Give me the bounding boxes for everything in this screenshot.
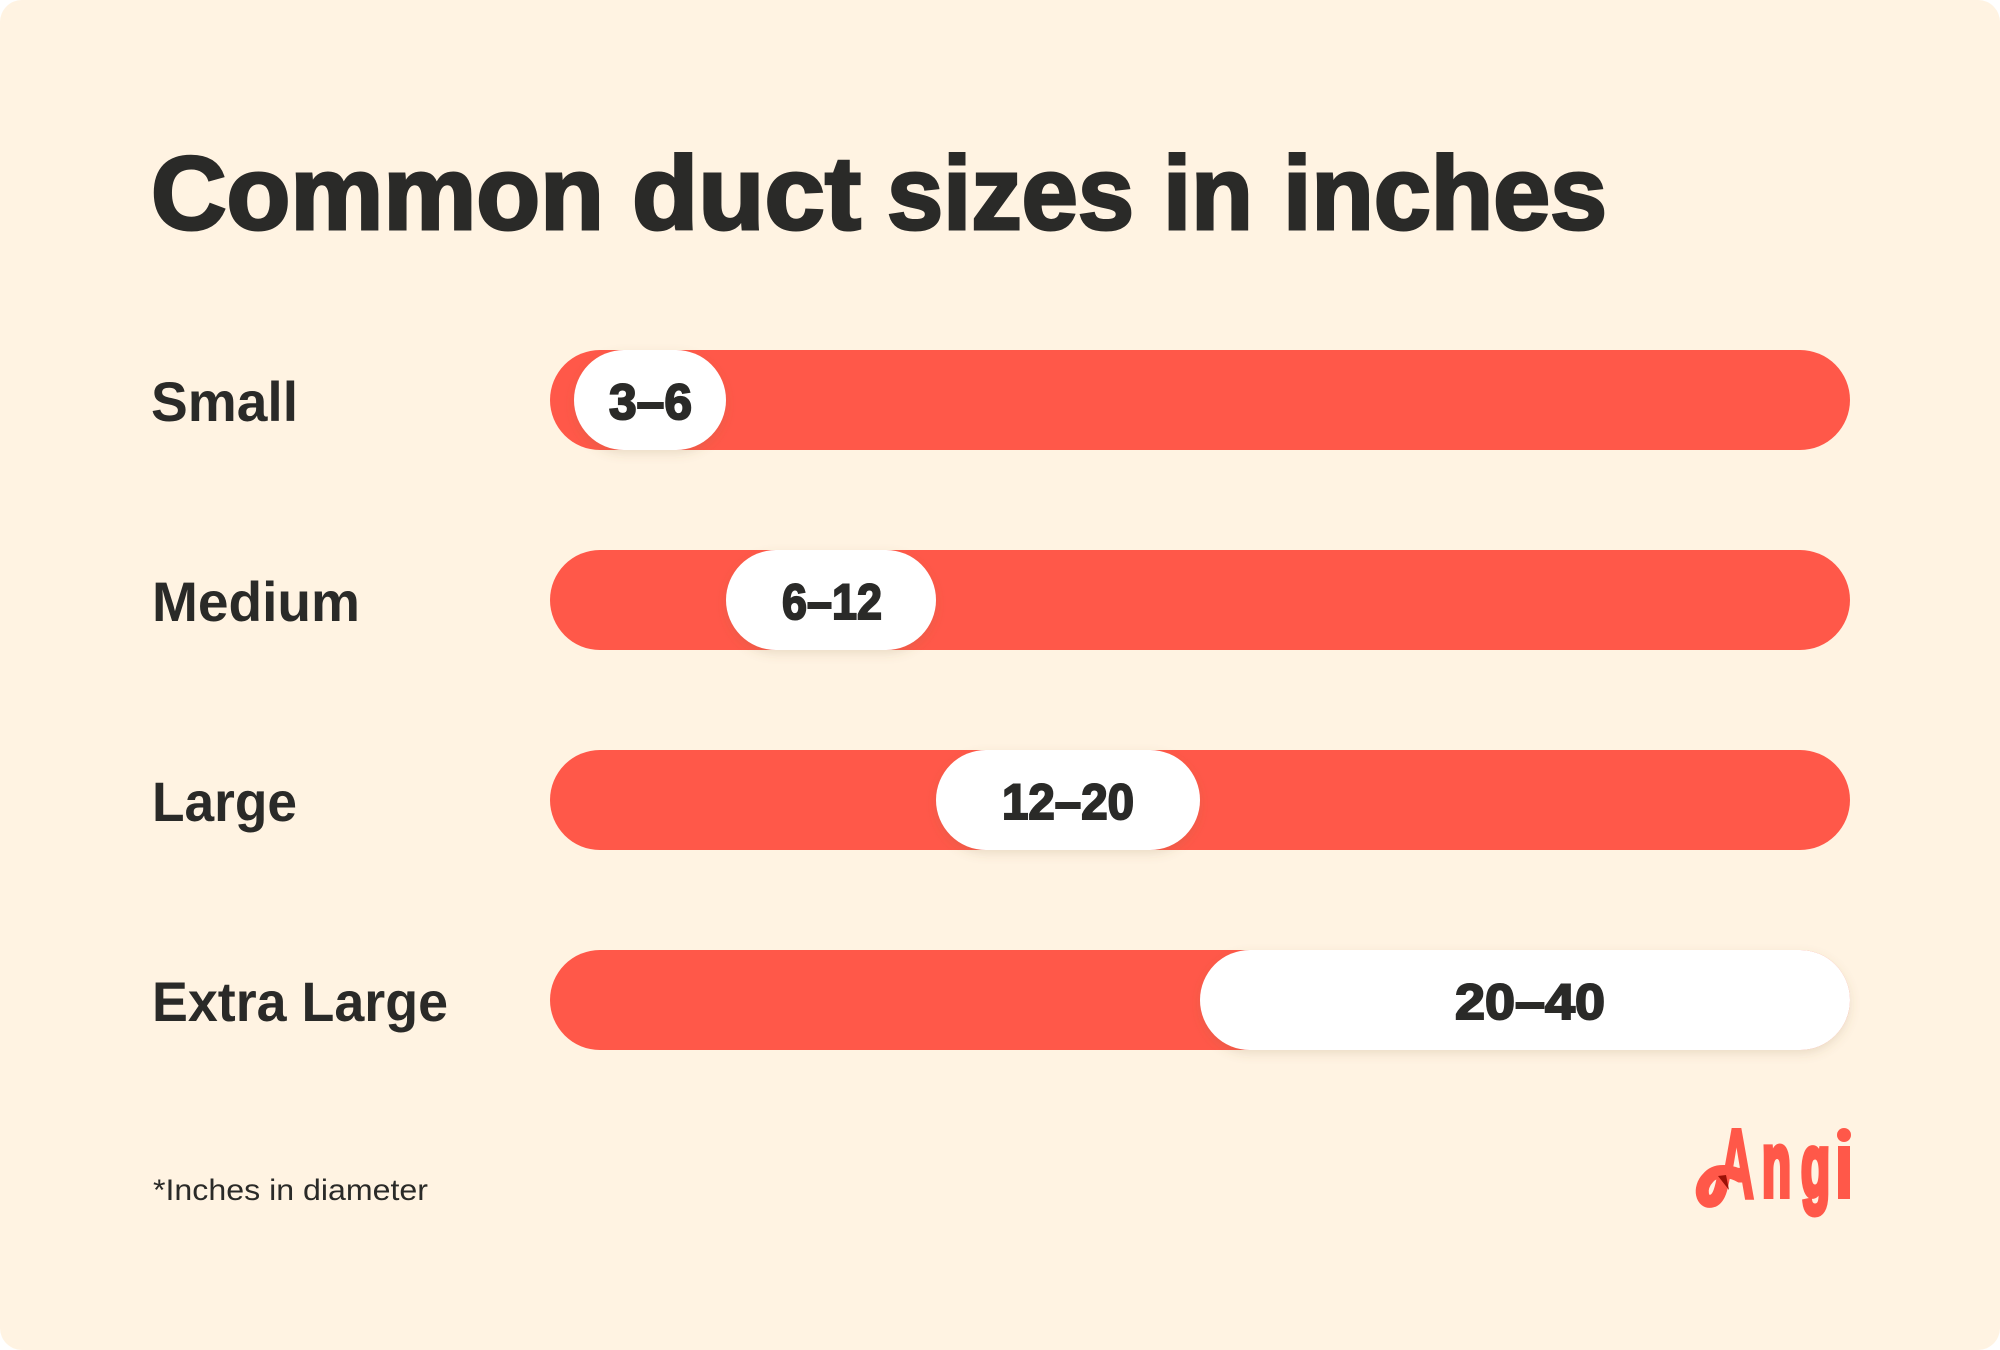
row: Extra Large xyxy=(152,950,1850,1050)
label: Extra Large: Extra Large xyxy=(152,970,448,1033)
title: inches xyxy=(1283,136,1607,252)
range pill: 20–40 xyxy=(1200,950,1850,1050)
range pill: 6–12 xyxy=(726,550,936,650)
row: Small xyxy=(151,350,1850,450)
footnote: *Inches in diameter xyxy=(153,1174,428,1207)
label: Small: Small xyxy=(151,370,298,433)
bar: Small xyxy=(550,350,1850,450)
bar: Extra Large xyxy=(550,950,1850,1050)
row: Medium xyxy=(152,550,1850,650)
range pill: 12–20 xyxy=(936,750,1200,850)
range pill: 3–6 xyxy=(574,350,726,450)
label: Medium: Medium xyxy=(152,570,360,633)
title: duct xyxy=(632,136,861,252)
range pill: 6–12: 6–12 xyxy=(782,574,882,630)
title: Common xyxy=(151,136,604,252)
title xyxy=(151,136,1607,252)
title: in xyxy=(1163,136,1253,252)
bar: Medium xyxy=(550,550,1850,650)
range pill: 20–40: 20–40 xyxy=(1455,974,1605,1030)
logo: Angi: g xyxy=(1801,1116,1830,1215)
row: Large xyxy=(152,750,1850,850)
bar: Large xyxy=(550,750,1850,850)
title: sizes xyxy=(887,136,1134,252)
range pill: 3–6: 3–6 xyxy=(609,374,692,430)
logo: Angi: A xyxy=(1719,1109,1754,1219)
range pill: 12–20: 12–20 xyxy=(1002,774,1134,830)
logo: Angi xyxy=(1700,1109,1851,1219)
label: Large: Large xyxy=(152,770,297,833)
logo: Angi: n xyxy=(1762,1114,1791,1216)
